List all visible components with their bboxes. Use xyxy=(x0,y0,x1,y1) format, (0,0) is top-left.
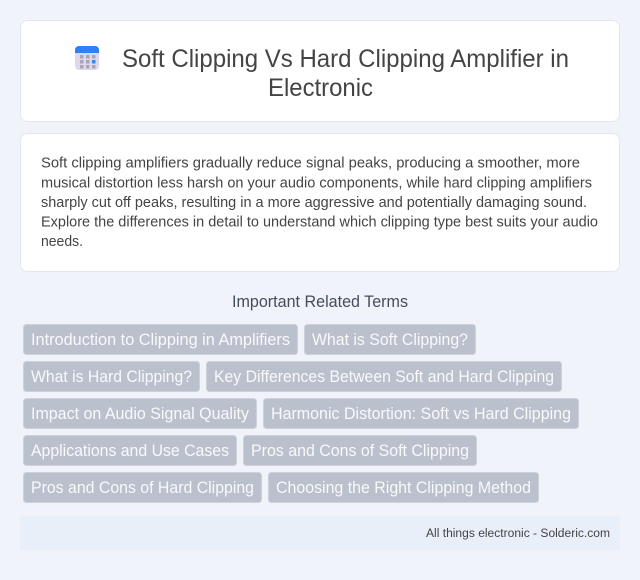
icon: calendar xyxy=(75,46,99,70)
tag xyxy=(24,362,200,392)
tag xyxy=(24,398,256,428)
title: Electronic xyxy=(268,74,373,102)
description text: Explore the differences in detail to understand which clipping type best suits your audio xyxy=(41,214,598,230)
tag xyxy=(304,324,476,354)
tag xyxy=(268,472,538,502)
description text: Soft clipping amplifiers gradually reduce signal peaks, producing a smoother, more xyxy=(41,156,580,172)
tag xyxy=(206,362,562,392)
header panel xyxy=(20,20,620,122)
footer xyxy=(20,516,620,550)
tag: Impact on Audio Signal Quality xyxy=(31,405,250,423)
tag xyxy=(244,436,476,466)
tag xyxy=(264,398,578,428)
tag: What is Hard Clipping? xyxy=(31,368,192,386)
description text: sharply cut off peaks, resulting in a more aggressive and potentially damaging sound. xyxy=(41,195,587,211)
tag xyxy=(24,472,262,502)
title: Soft Clipping Vs Hard Clipping Amplifier in xyxy=(122,45,569,73)
tag: Pros and Cons of Hard Clipping xyxy=(31,479,254,497)
tag: Introduction to Clipping in Amplifiers xyxy=(31,331,290,349)
description text xyxy=(41,156,598,250)
description text: musical distortion less harsh on your audio components, while hard clipping amplifiers xyxy=(41,176,592,192)
tag: Pros and Cons of Soft Clipping xyxy=(251,442,469,460)
tag: What is Soft Clipping? xyxy=(312,331,468,349)
tag xyxy=(24,324,298,354)
heading: important related terms: Important Related Terms xyxy=(232,293,408,311)
tag: Applications and Use Cases xyxy=(31,442,229,460)
tag xyxy=(24,436,236,466)
footer: All things electronic - Solderic.com xyxy=(426,526,610,540)
description panel xyxy=(20,134,620,272)
description text: needs. xyxy=(41,234,83,250)
tag: Choosing the Right Clipping Method xyxy=(276,479,531,497)
related terms tags xyxy=(24,324,578,502)
tag: Key Differences Between Soft and Hard Clipping xyxy=(214,368,554,386)
tag: Harmonic Distortion: Soft vs Hard Clipping xyxy=(271,405,571,423)
title xyxy=(122,45,569,102)
